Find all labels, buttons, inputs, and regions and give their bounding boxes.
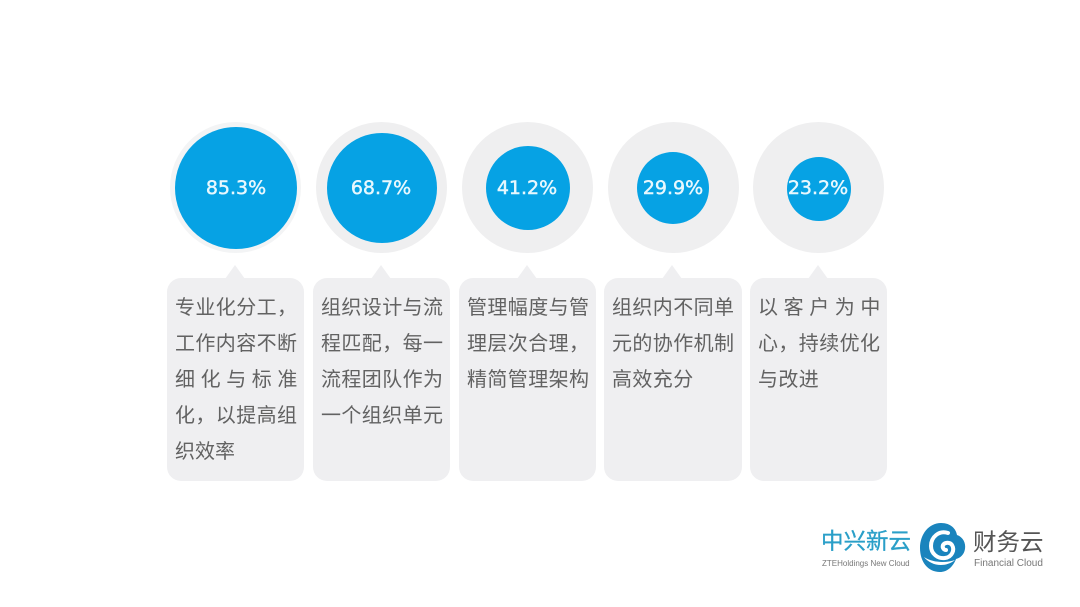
panel: card 1 text: 织效率 [175, 441, 235, 463]
value: 68.7%: 68.7% [351, 177, 411, 199]
circle: 23.2% [753, 122, 884, 253]
logo: Financial Cloud wordmark [973, 529, 1044, 569]
panel: card 3 text: 精简管理架构 [467, 369, 589, 391]
panel: card 1 text: 化，以提高组 [175, 405, 297, 427]
card pointer 1 [225, 265, 245, 279]
panel: card 1 text: 工作内容不断 [175, 333, 297, 355]
card pointer 2 [371, 265, 391, 279]
panel: card 5 text: 与改进 [758, 369, 819, 391]
panel: card 2 text: 程匹配，每一 [321, 333, 443, 355]
circle: 85.3% [170, 122, 301, 253]
panel: card 1 text [167, 278, 304, 481]
circle: 29.9% [608, 122, 739, 253]
panel: card 3 text: 管理幅度与管 [467, 297, 589, 319]
logo: ZTEHoldings New Cloud wordmark: ZTEHoldings New Cloud [822, 559, 910, 568]
logo: Financial Cloud wordmark: Financial Cloud [974, 558, 1043, 569]
card pointer 4 [662, 265, 682, 279]
circle: 41.2% [462, 122, 593, 253]
value: 29.9%: 29.9% [643, 177, 703, 199]
panel: card 2 text [313, 278, 450, 481]
card pointer 3 [517, 265, 537, 279]
panel: card 1 text: 专业化分工， [175, 297, 297, 319]
value: 23.2%: 23.2% [788, 177, 848, 199]
panel: card 2 text: 流程团队作为 [321, 369, 443, 391]
panel: card 3 text: 理层次合理， [467, 333, 589, 355]
circle: 68.7% [316, 122, 447, 253]
panel: card 4 text [604, 278, 742, 481]
icon: cloud swirl logo [920, 523, 966, 572]
logo: ZTEHoldings New Cloud wordmark [821, 529, 911, 568]
panel: card 5 text [750, 278, 887, 481]
panel: card 4 text: 组织内不同单 [612, 297, 734, 319]
panel: card 2 text: 一个组织单元 [321, 405, 443, 427]
panel: card 3 text [459, 278, 596, 481]
panel: card 4 text: 高效充分 [612, 369, 694, 391]
value: 41.2%: 41.2% [497, 177, 557, 199]
panel: card 2 text: 组织设计与流 [321, 297, 443, 319]
logo: Financial Cloud wordmark: 财务云 [973, 529, 1044, 555]
panel: card 5 text: 心，持续优化 [758, 333, 880, 355]
value: 85.3%: 85.3% [206, 177, 266, 199]
card pointer 5 [808, 265, 828, 279]
panel: card 5 text: 以客户为中 [758, 297, 886, 319]
logo: ZTEHoldings New Cloud wordmark: 中兴新云 [821, 529, 911, 554]
panel: card 4 text: 元的协作机制 [612, 333, 734, 355]
panel: card 1 text: 细化与标准 [175, 369, 303, 391]
